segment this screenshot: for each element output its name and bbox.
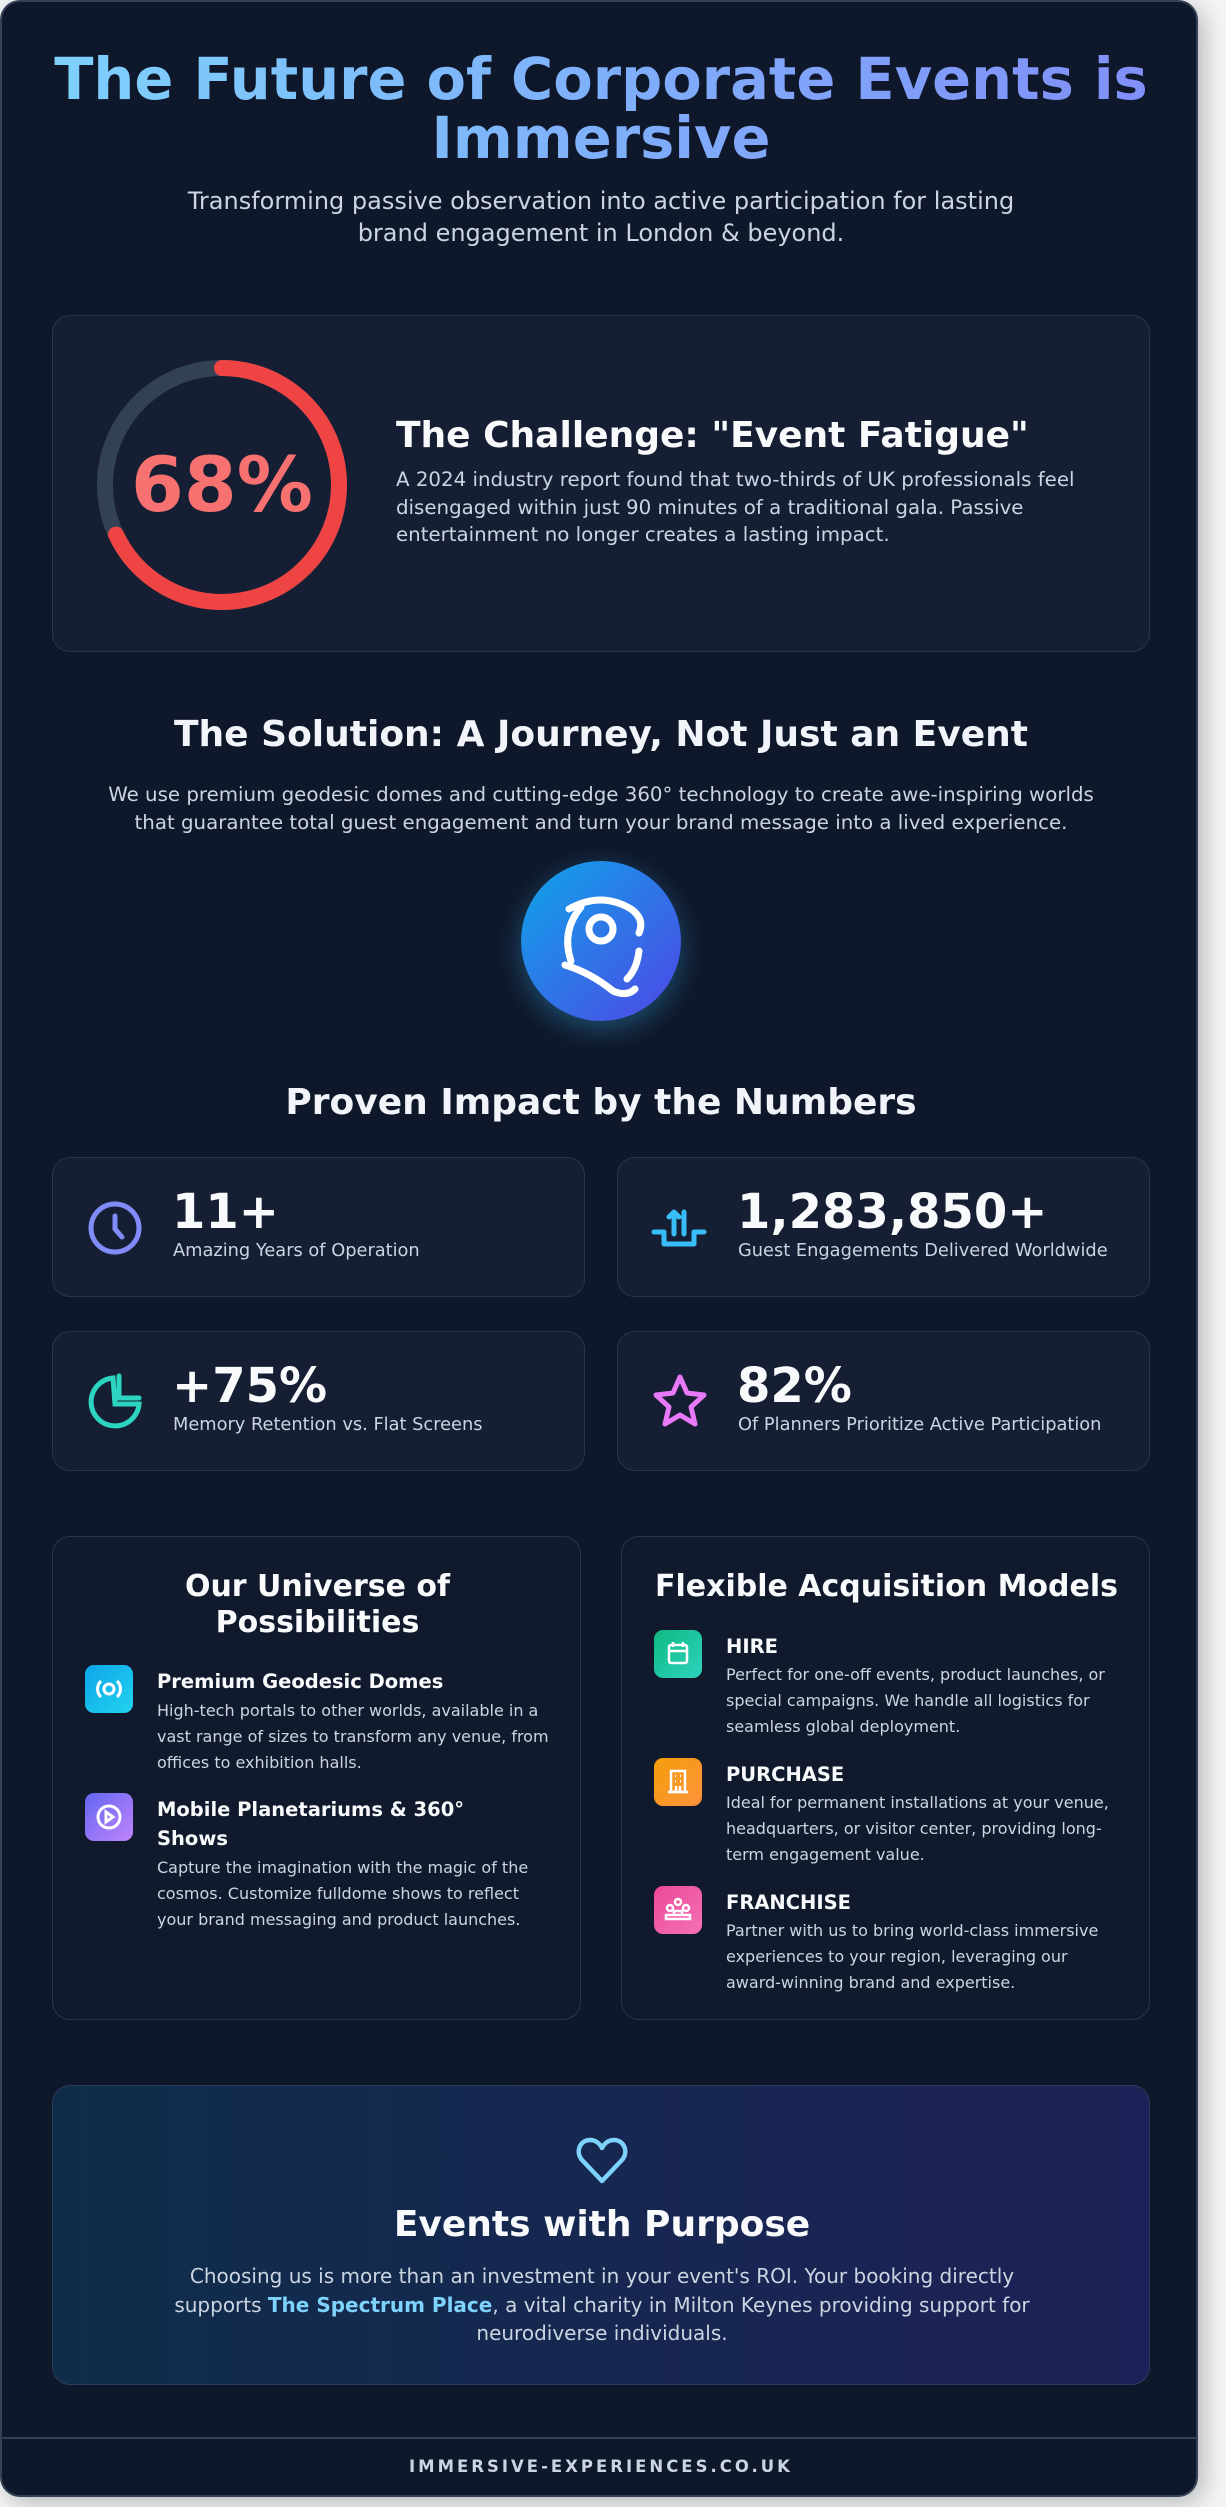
solution heading: The Solution: A Journey, Not Just an Event (174, 714, 1028, 755)
solution text: We use premium geodesic domes and cutting-edge 360° technology to create awe-inspiring worlds that guarantee total guest engagement and turn your brand message into a lived experience. (108, 783, 1094, 834)
label: Guest Engagements Delivered Worldwide (738, 1240, 1108, 1261)
stat: memory (52, 1331, 585, 1471)
label: Memory Retention vs. Flat Screens (173, 1414, 483, 1435)
stat: planners (617, 1331, 1150, 1471)
icon: heart (576, 2138, 628, 2184)
heading (185, 1569, 450, 1640)
label: Of Planners Prioritize Active Participation (738, 1414, 1101, 1435)
icon: star (654, 1374, 706, 1426)
stat: years (52, 1157, 585, 1297)
impact heading: Proven Impact by the Numbers (285, 1082, 917, 1123)
subtitle: Transforming passive observation into active participation for lasting brand engagement in London & beyond. (188, 187, 1014, 247)
item: purchase: PURCHASE (726, 1763, 844, 1786)
text: Choosing us is more than an investment in your event's ROI. Your booking directly supports The Spectrum Place, a vital charity in Milton Keynes providing support for neurodiverse individuals. (174, 2264, 1030, 2345)
footer: IMMERSIVE-EXPERIENCES.CO.UK (409, 2457, 793, 2476)
chart: 68% ring: 68% (131, 440, 313, 529)
item: domes: High-tech portals to other worlds, available in a vast range of sizes to transform any venue, from offices to exhibition halls. (157, 1701, 549, 1772)
item: hire (654, 1630, 1105, 1736)
number: +75% (172, 1358, 327, 1414)
label: Amazing Years of Operation (173, 1240, 420, 1261)
item: franchise (654, 1886, 1098, 1992)
panel: acquisition (621, 1536, 1150, 2020)
heading: Flexible Acquisition Models (655, 1569, 1118, 1604)
number: 1,283,850+ (737, 1184, 1047, 1240)
panel: challenge (52, 315, 1150, 652)
title (54, 46, 1148, 172)
item: purchase: Ideal for permanent installations at your venue, headquarters, or visitor center, providing long-term engagement value. (726, 1793, 1109, 1864)
icon: dome circle (521, 861, 681, 1021)
panel: purpose (52, 2085, 1150, 2385)
icon: transfer (652, 1210, 706, 1246)
icon: clock (88, 1202, 142, 1254)
item: hire: HIRE (726, 1635, 778, 1658)
item: planetariums: Mobile Planetariums & 360° Shows (157, 1798, 464, 1850)
challenge heading: The Challenge: "Event Fatigue" (396, 415, 1029, 456)
number: 11+ (172, 1184, 279, 1240)
heading: Possibilities (216, 1605, 419, 1640)
number: 82% (737, 1358, 852, 1414)
item: hire: Perfect for one-off events, product launches, or special campaigns. We handle all logistics for seamless global deployment. (726, 1665, 1105, 1736)
title: The Future of Corporate Events is (54, 46, 1148, 113)
title: Immersive (432, 105, 770, 172)
item: franchise: Partner with us to bring world-class immersive experiences to your region, leveraging our award-winning brand and expertise. (726, 1921, 1098, 1992)
heading: Events with Purpose (394, 2204, 810, 2245)
panel: universe (52, 1536, 581, 2020)
item: franchise: FRANCHISE (726, 1891, 851, 1914)
item: domes: Premium Geodesic Domes (157, 1670, 443, 1693)
item: planetariums: Capture the imagination with the magic of the cosmos. Customize fulldome shows to reflect your brand messaging and product launches. (157, 1858, 528, 1929)
heading: Our Universe of (185, 1569, 450, 1604)
item: planetariums (85, 1793, 528, 1929)
item: domes (85, 1665, 549, 1772)
chart: 68% ring (97, 360, 347, 610)
challenge text: A 2024 industry report found that two-thirds of UK professionals feel disengaged within just 90 minutes of a traditional gala. Passive entertainment no longer creates a lasting impact. (396, 468, 1075, 546)
stat: engagements (617, 1157, 1150, 1297)
item: purchase (654, 1758, 1109, 1864)
icon: pie (88, 1374, 142, 1428)
